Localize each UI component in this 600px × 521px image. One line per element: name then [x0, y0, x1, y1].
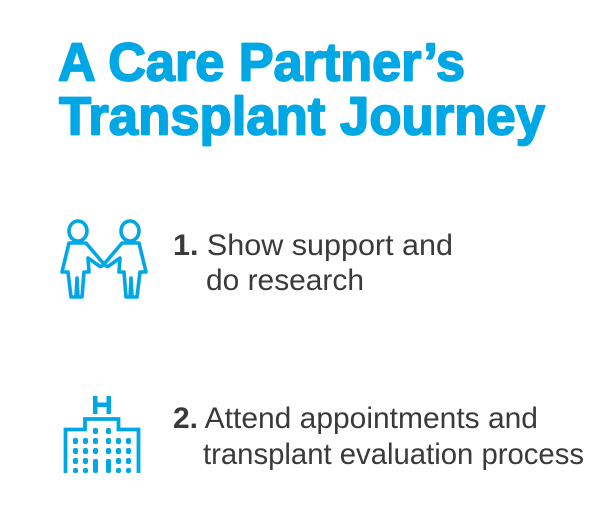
icon: hospital building: [66, 396, 138, 473]
step 2 text: [173, 402, 584, 471]
step 1 text: 1. Show support and: [173, 229, 453, 262]
title: [58, 32, 545, 146]
icon: two people holding hands: [62, 221, 146, 297]
step 2 text: 2. Attend appointments and: [173, 402, 538, 435]
title: A Care Partner’s: [58, 32, 465, 92]
title: Transplant Journey: [59, 86, 545, 146]
step 2 text: transplant evaluation process: [203, 438, 584, 471]
step 1 text: do research: [206, 264, 364, 297]
step 1 text: [173, 229, 453, 297]
